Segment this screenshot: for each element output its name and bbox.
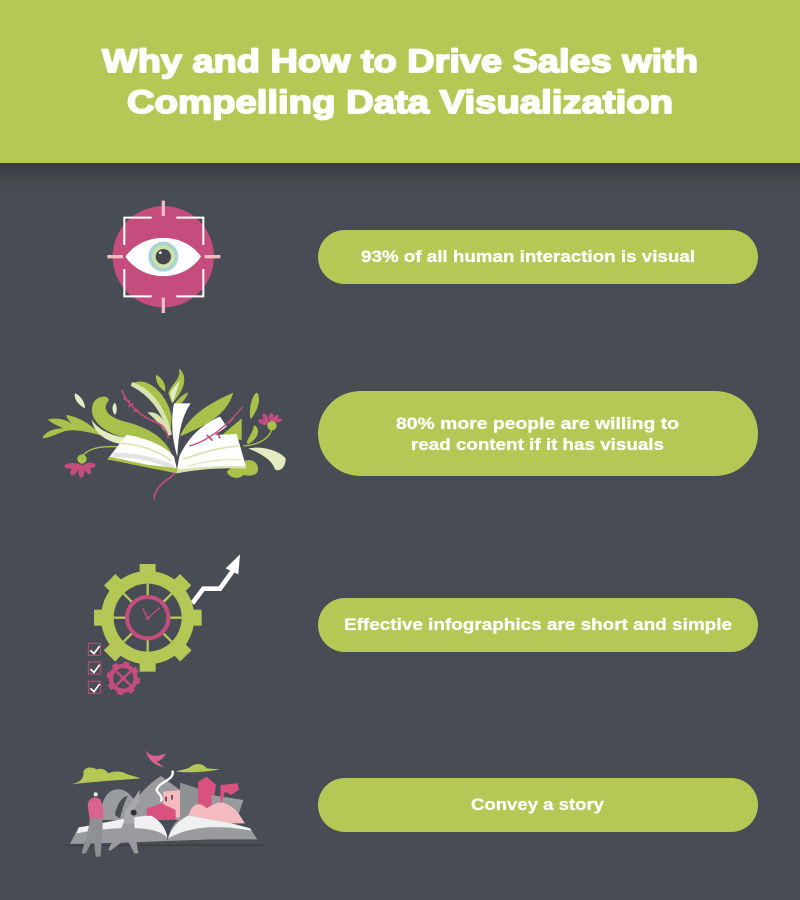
figure: woman (108, 789, 140, 853)
title: Why and How to Drive Sales with (102, 43, 698, 79)
small gear (108, 663, 139, 694)
flower: left (64, 454, 96, 478)
title: Compelling Data Visualization (127, 84, 673, 120)
icon: eye in target (107, 201, 220, 313)
callout: convey a story: Convey a story (471, 795, 605, 814)
checklist (88, 643, 101, 693)
book pages (70, 815, 257, 844)
callout: 93% visual (318, 230, 758, 284)
icon: open book with plants (42, 368, 286, 499)
header banner (0, 0, 800, 163)
large gear (94, 564, 202, 672)
flower: right (257, 413, 283, 430)
callout: 93% visual: 93% of all human interaction is visual (361, 247, 695, 266)
title (102, 43, 698, 120)
book pages (107, 403, 246, 473)
callout: short and simple: Effective infographics are short and simple (344, 615, 732, 634)
icon: gear with clock and rising arrow (88, 554, 240, 694)
callout: 80% more people: 80% more people are willing to (396, 414, 679, 433)
callout: 80% more people (318, 391, 758, 476)
callout: 80% more people: read content if it has visuals (411, 435, 664, 454)
callout: convey a story (318, 778, 758, 832)
figure: man (82, 792, 103, 857)
callout: short and simple (318, 598, 758, 652)
icon: story book with city and figures (65, 750, 263, 857)
arrow (192, 554, 240, 603)
